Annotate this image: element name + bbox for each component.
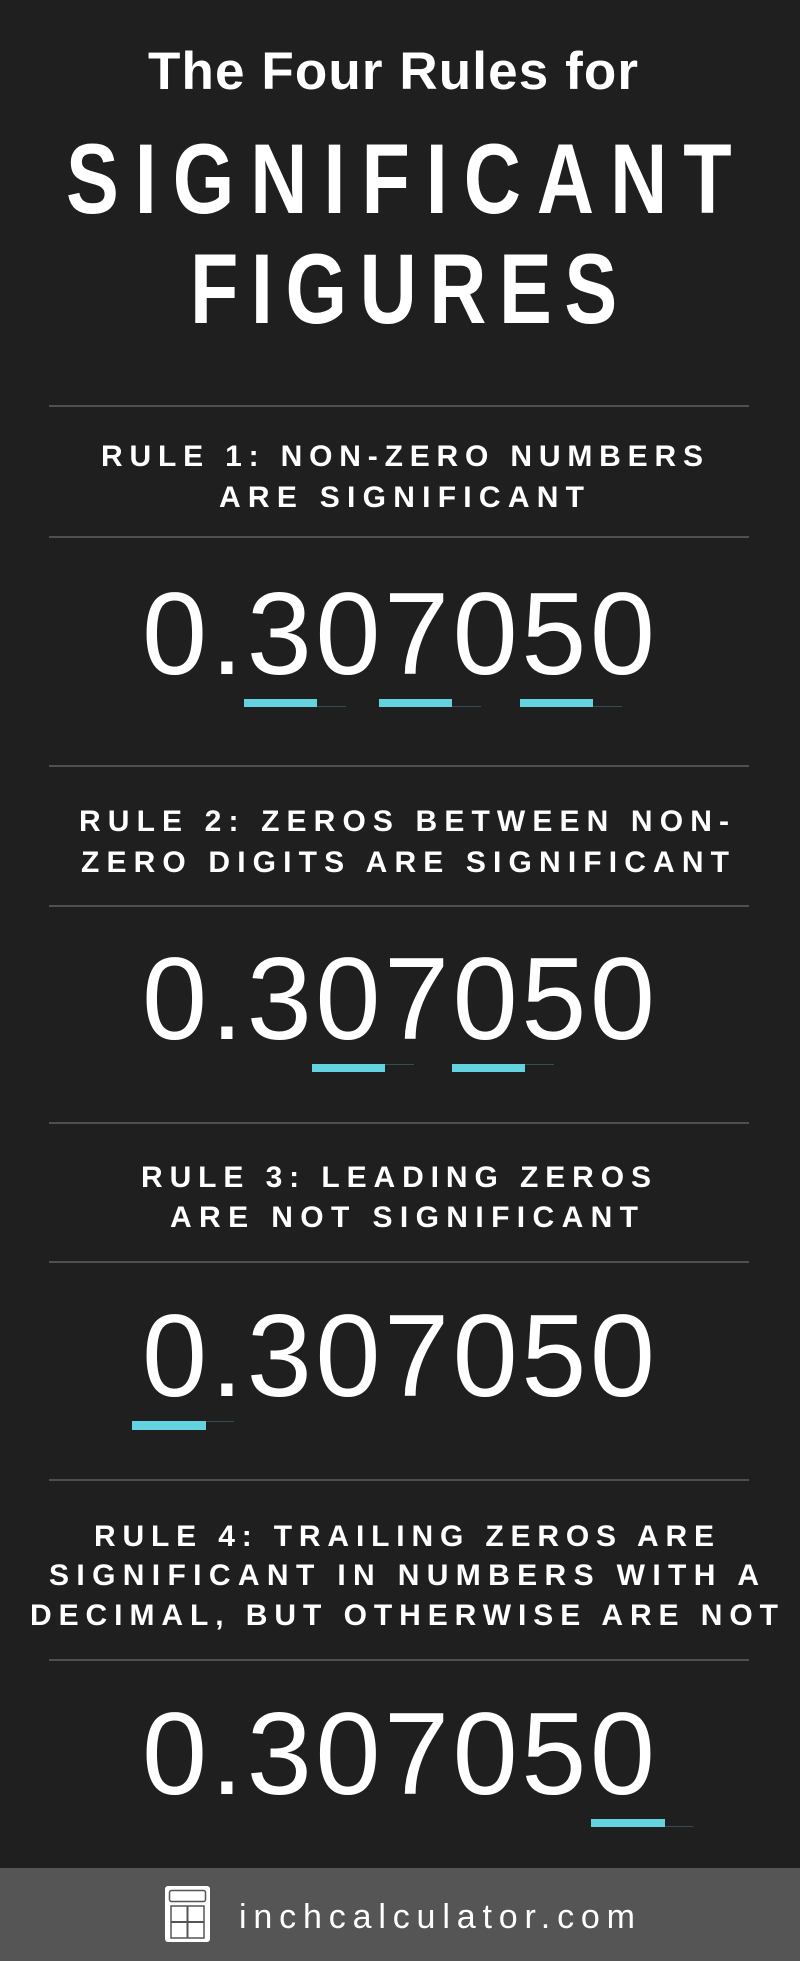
- title: SIGNIFICANT: [66, 124, 732, 234]
- rule 2 heading: ZERO DIGITS ARE SIGNIFICANT: [81, 846, 729, 879]
- rule 4 heading: SIGNIFICANT IN NUMBERS WITH A: [49, 1559, 759, 1592]
- rule 4 number: 0.307050: [142, 1688, 655, 1819]
- rule 4 heading: RULE 4: TRAILING ZEROS ARE: [94, 1520, 714, 1553]
- title: FIGURES: [190, 234, 617, 344]
- title: The Four Rules for: [148, 42, 638, 101]
- rule 1 number: 0.307050: [142, 568, 655, 699]
- rule 3 heading: RULE 3: LEADING ZEROS: [141, 1161, 651, 1194]
- rule 4 heading: DECIMAL, BUT OTHERWISE ARE NOT: [30, 1599, 778, 1632]
- rule 3 heading: ARE NOT SIGNIFICANT: [170, 1201, 638, 1234]
- rule 2 heading: RULE 2: ZEROS BETWEEN NON-: [79, 805, 729, 838]
- rule 2 number: 0.307050: [142, 933, 655, 1064]
- footer text: inchcalculator.com: [239, 1898, 635, 1936]
- rule 1 heading: ARE SIGNIFICANT: [219, 481, 584, 514]
- rule 3 number: 0.307050: [142, 1290, 655, 1421]
- rule 1 heading: RULE 1: NON-ZERO NUMBERS: [101, 440, 703, 473]
- footer: [0, 1868, 800, 1961]
- title: [66, 42, 732, 344]
- rule 4 heading: [30, 1520, 778, 1632]
- rule 2 heading: [79, 805, 729, 879]
- rule 3 heading: [141, 1161, 651, 1234]
- rule 1 heading: [101, 440, 703, 514]
- icon: calculator: [165, 1886, 210, 1942]
